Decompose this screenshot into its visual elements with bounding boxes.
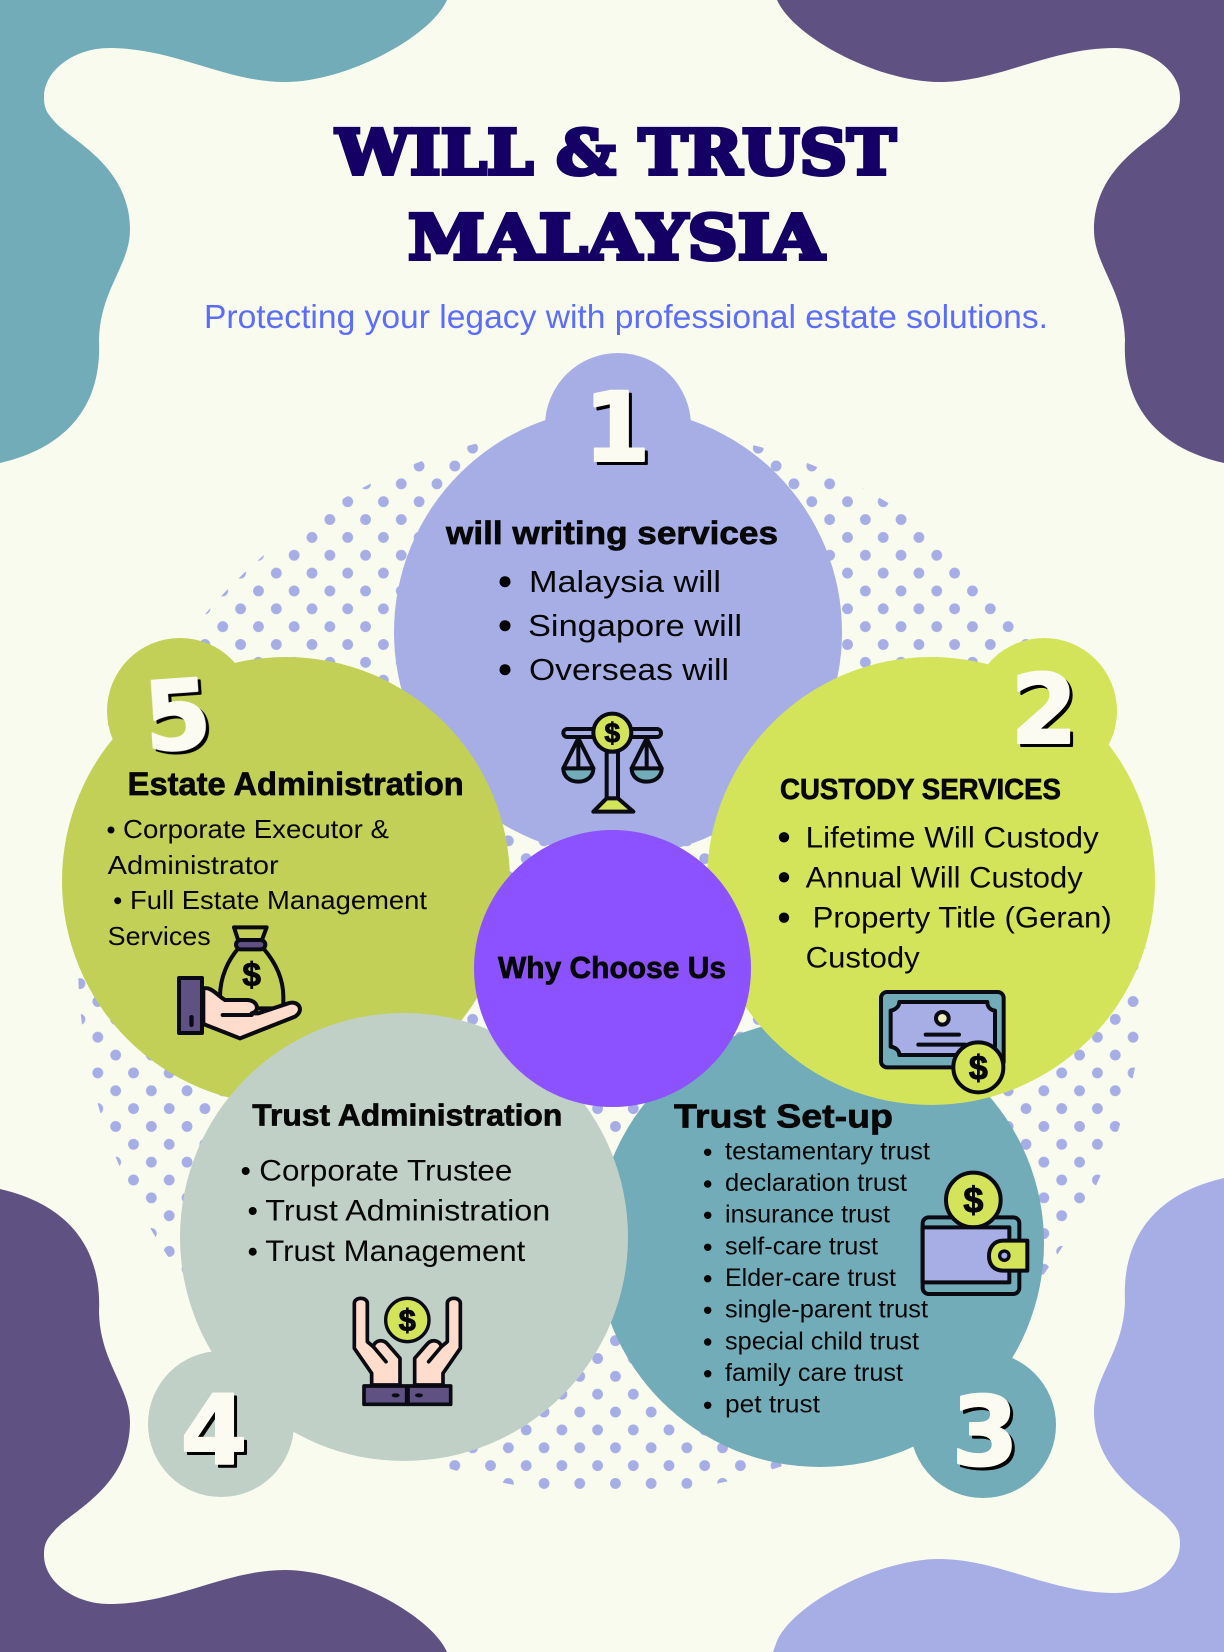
panel 4 list: Trust Administration bbox=[265, 1195, 550, 1228]
panel 2 list: Property Title (Geran) bbox=[813, 901, 1112, 934]
panel 2 heading: CUSTODY SERVICES bbox=[780, 774, 1061, 806]
panel 2 list: Custody bbox=[806, 942, 920, 975]
number 2: 2 bbox=[1011, 654, 1077, 766]
panel 3 heading: Trust Set-up bbox=[674, 1098, 893, 1135]
panel 3 shape bbox=[596, 1019, 1056, 1498]
center circle: why choose us bbox=[474, 830, 751, 1107]
panel: 3 trust set-up bbox=[596, 1019, 1056, 1498]
title bbox=[335, 116, 896, 274]
icon: balance scale with coin: $ bbox=[605, 718, 621, 749]
panel 3 list: pet trust bbox=[725, 1391, 820, 1419]
panel: 1 will writing services bbox=[394, 353, 842, 856]
number 1: 1 bbox=[584, 372, 650, 484]
panel 3 list: special child trust bbox=[725, 1327, 919, 1355]
panel 4 list bbox=[242, 1155, 550, 1268]
panel 4 list: Corporate Trustee bbox=[259, 1155, 512, 1188]
panel 5 shape bbox=[62, 638, 510, 1105]
panel 1 list: Overseas will bbox=[529, 652, 729, 687]
panel 3 list: self-care trust bbox=[725, 1232, 878, 1260]
icon: certificate with coin: $ bbox=[969, 1049, 988, 1087]
panel 1 list bbox=[500, 564, 742, 687]
panel 1 heading: will writing services bbox=[445, 515, 778, 551]
panel 3 list: single-parent trust bbox=[725, 1296, 928, 1324]
icon: wallet with coin: $ bbox=[963, 1180, 983, 1221]
panel 3 list bbox=[704, 1137, 930, 1419]
number 3: 3 bbox=[952, 1376, 1018, 1488]
icon: hand holding money bag: $ bbox=[242, 957, 261, 994]
icon: certificate with coin bbox=[881, 992, 1004, 1092]
panel 1 shape bbox=[394, 353, 842, 856]
dotted background disc bbox=[78, 426, 1146, 1494]
panel 4 list: Trust Management bbox=[265, 1235, 526, 1268]
number 4: 4 bbox=[181, 1375, 247, 1487]
panel: 2 custody services bbox=[707, 638, 1155, 1105]
panel 2 list: Annual Will Custody bbox=[806, 861, 1083, 894]
panel 5 list bbox=[108, 814, 428, 951]
panel 5 list: Administrator bbox=[108, 850, 279, 880]
panel: 4 trust administration bbox=[148, 1013, 628, 1497]
panel 3 list: Elder-care trust bbox=[725, 1264, 896, 1292]
panel 3 list: insurance trust bbox=[725, 1201, 890, 1229]
title: WILL & TRUST bbox=[335, 116, 896, 189]
panel 4 heading: Trust Administration bbox=[252, 1098, 562, 1133]
panel: 5 estate administration bbox=[62, 638, 510, 1105]
panel 2 list: Lifetime Will Custody bbox=[806, 821, 1099, 854]
panel 3 list: family care trust bbox=[725, 1359, 903, 1387]
corner blob: bottom right periwinkle bbox=[773, 1178, 1224, 1652]
number 5: 5 bbox=[140, 658, 215, 774]
panel 1 list: Malaysia will bbox=[529, 564, 721, 599]
panel 3 list: declaration trust bbox=[725, 1169, 907, 1197]
icon: wallet with coin bbox=[923, 1173, 1027, 1294]
center circle: why choose us: Why Choose Us bbox=[498, 950, 726, 985]
corner blob: top left teal bbox=[0, 0, 447, 463]
title: MALAYSIA bbox=[408, 201, 825, 274]
icon: balance scale with coin bbox=[563, 714, 662, 812]
panel 2 shape bbox=[707, 638, 1155, 1105]
panel 4 shape bbox=[148, 1013, 628, 1497]
icon: hand holding money bag bbox=[179, 927, 300, 1038]
icon: open hands with coin: $ bbox=[399, 1304, 416, 1338]
subtitle: Protecting your legacy with professional estate solutions. bbox=[204, 298, 1048, 335]
panel 2 list bbox=[779, 821, 1112, 975]
icon: open hands with coin bbox=[354, 1298, 460, 1404]
panel 1 list: Singapore will bbox=[528, 608, 742, 643]
panel 5 list: Corporate Executor & bbox=[123, 814, 389, 844]
panel 5 list: Full Estate Management bbox=[130, 885, 428, 915]
panel 5 list: Services bbox=[108, 921, 211, 951]
panel 3 list: testamentary trust bbox=[725, 1137, 930, 1165]
panel 5 heading: Estate Administration bbox=[128, 766, 464, 802]
corner blob: bottom left purple bbox=[0, 1189, 447, 1652]
corner blob: top right purple bbox=[777, 0, 1224, 463]
